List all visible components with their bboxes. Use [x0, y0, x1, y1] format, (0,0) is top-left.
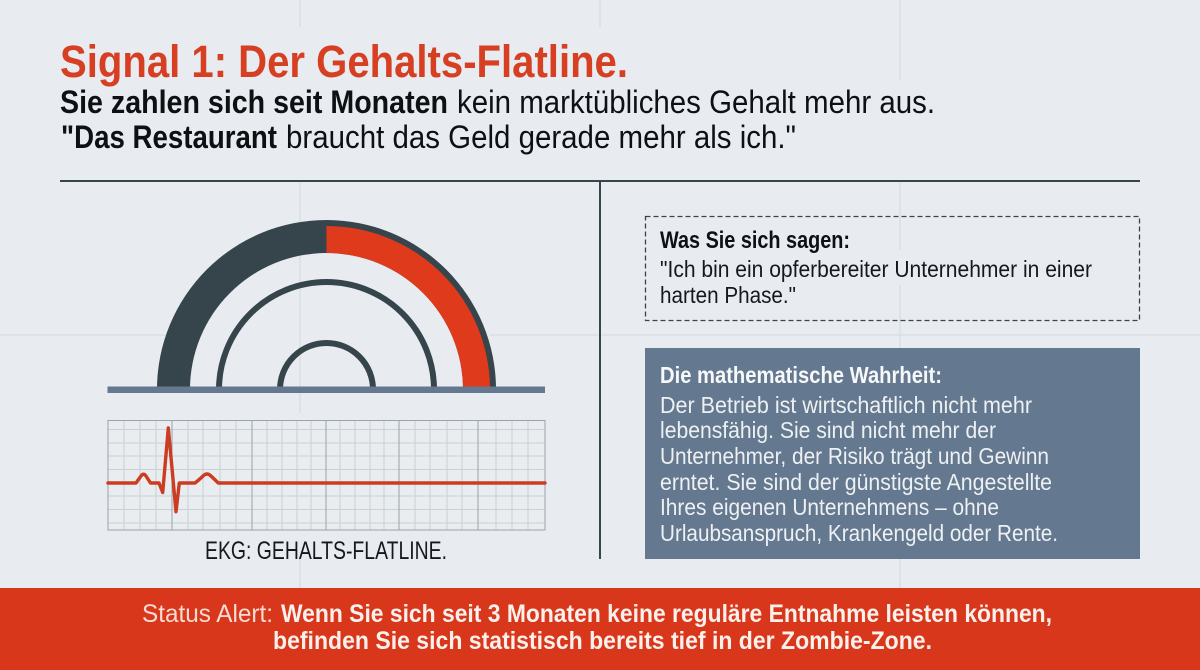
EKG trace — [108, 428, 545, 512]
alert text — [142, 600, 1052, 655]
gauge inner ring — [280, 343, 373, 390]
divider: horizontal rule — [60, 180, 1140, 182]
panel: the mathematical truth — [645, 348, 1140, 559]
panel body text: Urlaubsanspruch, Krankengeld oder Rente. — [660, 520, 1058, 546]
EKG caption: EKG: GEHALTS-FLATLINE. — [205, 537, 447, 565]
gauge outer dark arc — [157, 220, 496, 390]
chart: EKG strip — [108, 420, 545, 530]
divider: vertical rule — [599, 182, 601, 559]
subtitle text block: Sie zahlen sich seit Monaten — [60, 84, 448, 120]
subtitle text block: kein marktübliches Gehalt mehr aus. — [457, 84, 935, 120]
panel quote: "Ich bin ein opferbereiter Unternehmer in einer — [660, 256, 1092, 282]
chart: semicircular salary gauge — [108, 220, 545, 393]
panel body text: Ihres eigenen Unternehmens – ohne — [660, 494, 999, 520]
panel quote: harten Phase." — [660, 282, 796, 308]
panel body text: lebensfähig. Sie sind nicht mehr der — [660, 417, 996, 443]
title: Signal 1: Der Gehalts-Flatline. — [60, 36, 628, 87]
status alert banner — [0, 588, 1200, 670]
subtitle text block: "Das Restaurant — [61, 119, 277, 155]
gauge base bar — [108, 386, 545, 393]
gauge red segment — [326, 226, 490, 390]
panel body text — [660, 392, 1058, 546]
alert text: Status Alert: — [142, 600, 273, 628]
panel: what you tell yourself — [646, 216, 1140, 320]
panel body text: Unternehmer, der Risiko trägt und Gewinn — [660, 443, 1049, 469]
panel heading: Was Sie sich sagen: — [660, 227, 850, 254]
panel heading: Die mathematische Wahrheit: — [660, 362, 942, 388]
subtitle text block: braucht das Geld gerade mehr als ich." — [286, 119, 796, 155]
panel quote — [660, 256, 1092, 308]
panel body text: Der Betrieb ist wirtschaftlich nicht mehr — [660, 392, 1032, 418]
subtitle text block — [60, 84, 935, 155]
alert text: Wenn Sie sich seit 3 Monaten keine reguläre Entnahme leisten können, — [281, 600, 1052, 628]
gauge middle ring — [219, 282, 434, 390]
alert text: befinden Sie sich statistisch bereits tief in der Zombie-Zone. — [273, 627, 932, 655]
panel body text: erntet. Sie sind der günstigste Angestellte — [660, 469, 1052, 495]
